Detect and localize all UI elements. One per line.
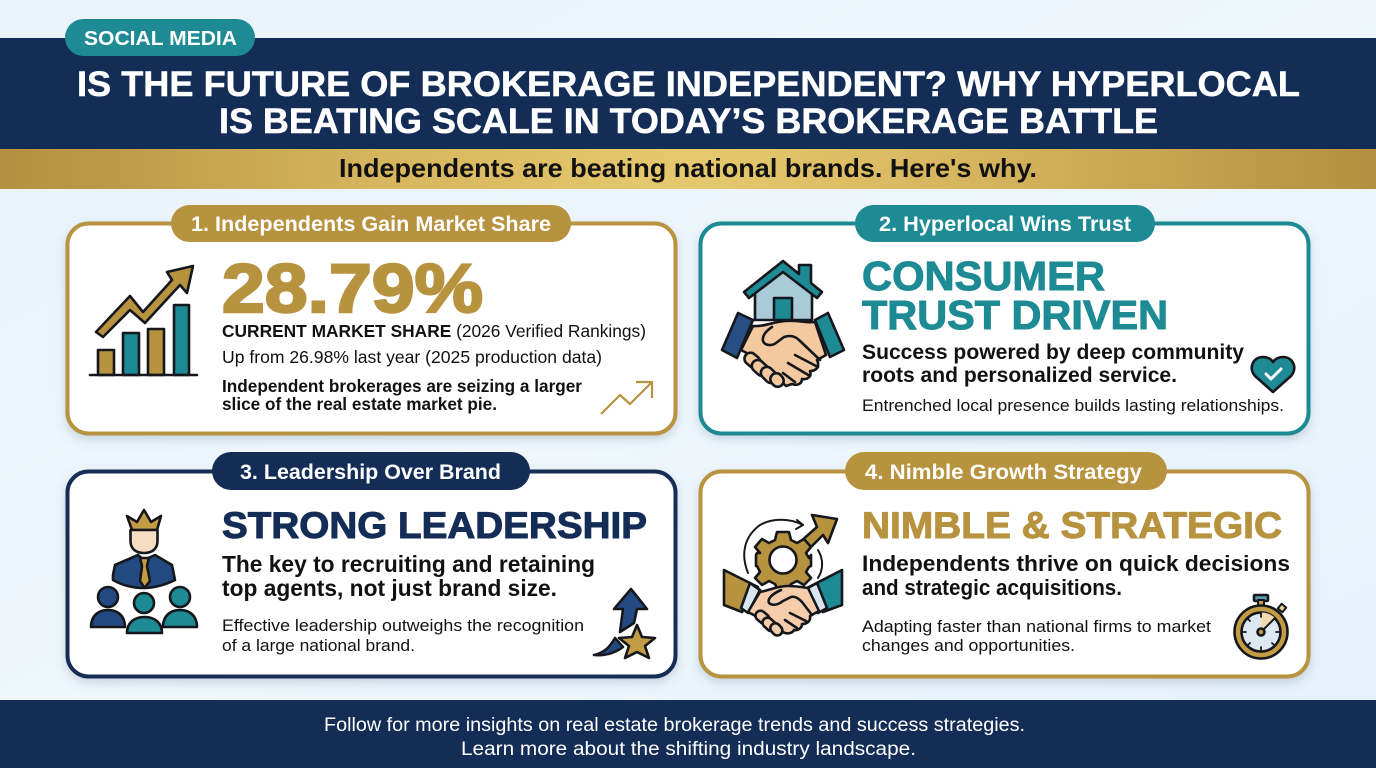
main title: IS BEATING SCALE IN TODAY’S BROKERAGE BATTLE — [219, 102, 1158, 141]
panel 4 description: Adapting faster than national firms to market — [862, 617, 1211, 636]
big statistic: 28.79% — [222, 250, 483, 327]
icon: house over handshake — [722, 261, 844, 389]
panel 4 bold statement: Independents thrive on quick decisions — [862, 551, 1290, 576]
panel 1: market share — [68, 205, 676, 434]
panel 3 description: Effective leadership outweighs the recognition — [222, 616, 584, 635]
panel 3 heading — [212, 452, 530, 490]
panel 1 heading — [171, 205, 571, 242]
panel 1 description — [222, 376, 582, 414]
panel 3 bold statement — [222, 551, 595, 601]
panel 4 bold statement — [862, 551, 1290, 600]
panel 1 description: slice of the real estate market pie. — [222, 394, 497, 414]
panel 1 description: Independent brokerages are seizing a larger — [222, 376, 582, 396]
icon: arrow and star — [594, 589, 655, 658]
panel 1 heading: 1. Independents Gain Market Share — [191, 213, 551, 236]
heading: consumer trust driven: CONSUMER — [862, 253, 1105, 299]
main title: IS THE FUTURE OF BROKERAGE INDEPENDENT? WHY HYPERLOCAL — [77, 65, 1300, 104]
year over year note: Up from 26.98% last year (2025 production data) — [222, 347, 602, 367]
icon: stopwatch — [1234, 595, 1288, 658]
panel 3 bold statement: The key to recruiting and retaining — [222, 551, 595, 577]
panel 4 description — [862, 617, 1211, 655]
heading: consumer trust driven — [862, 253, 1168, 338]
footer text: Learn more about the shifting industry landscape. — [461, 739, 916, 760]
category tag: SOCIAL MEDIA — [84, 28, 237, 50]
panel 4 heading: 4. Nimble Growth Strategy — [865, 461, 1142, 484]
panel 2 bold statement — [862, 341, 1244, 387]
header banner — [0, 38, 1376, 149]
main title — [77, 65, 1300, 141]
icon: rising bar chart — [90, 266, 197, 375]
panel 3 description: of a large national brand. — [222, 636, 415, 655]
panel 2 bold statement: Success powered by deep community — [862, 341, 1244, 364]
panel 3 heading: 3. Leadership Over Brand — [240, 461, 501, 484]
panel 3 bold statement: top agents, not just brand size. — [222, 575, 557, 601]
panel 3 description — [222, 616, 584, 655]
footer — [0, 700, 1376, 768]
market share label: CURRENT MARKET SHARE (2026 Verified Rankings) — [222, 321, 646, 341]
icon: heart with check — [1252, 357, 1294, 392]
panel 2 bold statement: roots and personalized service. — [862, 364, 1177, 387]
heading: consumer trust driven: TRUST DRIVEN — [862, 292, 1168, 338]
panel 4 bold statement: and strategic acquisitions. — [862, 575, 1122, 600]
footer text — [324, 715, 1025, 760]
category tag — [65, 19, 255, 56]
panel 4 heading — [845, 452, 1167, 490]
icon: crowned leader and team — [91, 510, 197, 633]
panel 2 heading — [855, 205, 1155, 242]
subtitle band — [0, 149, 1376, 189]
heading: nimble and strategic: NIMBLE & STRATEGIC — [862, 505, 1282, 546]
panel 2 heading: 2. Hyperlocal Wins Trust — [879, 213, 1131, 236]
icon: gear, arrow and handshake — [724, 515, 842, 638]
heading: strong leadership: STRONG LEADERSHIP — [222, 505, 647, 546]
panel 4 description: changes and opportunities. — [862, 636, 1075, 655]
footer text: Follow for more insights on real estate brokerage trends and success strategies. — [324, 715, 1025, 736]
panel 2 description: Entrenched local presence builds lasting relationships. — [862, 396, 1284, 415]
panel 2: consumer trust — [700, 205, 1308, 434]
icon: small trend arrow — [601, 382, 652, 414]
subtitle band: Independents are beating national brands. Here's why. — [339, 153, 1037, 183]
panel 3: leadership — [68, 452, 676, 676]
panel 4: nimble growth — [700, 452, 1308, 676]
